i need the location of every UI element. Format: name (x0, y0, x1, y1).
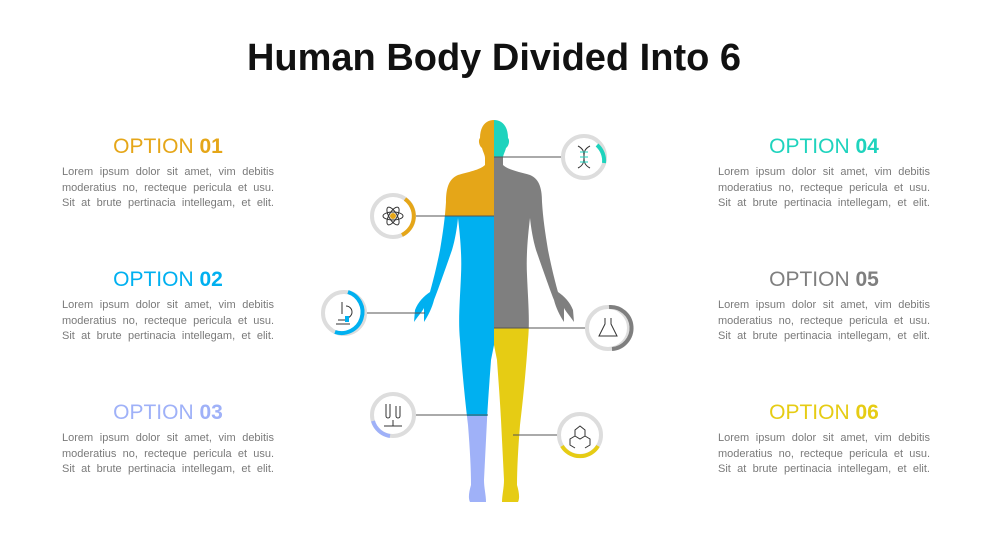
icon: flask (587, 307, 632, 349)
icon: microscope (323, 292, 365, 334)
option 01 (62, 135, 274, 209)
option 06: OPTION 06 (769, 401, 879, 424)
icon: molecule (559, 414, 601, 456)
option 02: Lorem ipsum dolor sit amet, vim debitis moderatius no, recteque pericula et usu. Sit at brute pertinacia intellegam, et elit. (62, 299, 274, 342)
option 06: Lorem ipsum dolor sit amet, vim debitis moderatius no, recteque pericula et usu. Sit at brute pertinacia intellegam, et elit. (718, 432, 930, 475)
option 05: Lorem ipsum dolor sit amet, vim debitis moderatius no, recteque pericula et usu. Sit at brute pertinacia intellegam, et elit. (718, 299, 930, 342)
option 04: Lorem ipsum dolor sit amet, vim debitis moderatius no, recteque pericula et usu. Sit at brute pertinacia intellegam, et elit. (718, 166, 930, 209)
option 02: OPTION 02 (113, 268, 223, 291)
option 04 (718, 135, 930, 209)
title: Human Body Divided Into 6 (247, 37, 741, 79)
right half body (494, 120, 574, 502)
option 03: Lorem ipsum dolor sit amet, vim debitis moderatius no, recteque pericula et usu. Sit at brute pertinacia intellegam, et elit. (62, 432, 274, 475)
option 04: OPTION 04 (769, 135, 879, 158)
option 05: OPTION 05 (769, 268, 879, 291)
icon: dna (563, 136, 605, 178)
connector lines (366, 157, 586, 435)
option 06 (718, 401, 930, 475)
option 01: OPTION 01 (113, 135, 223, 158)
icon: test tubes (372, 394, 414, 436)
option 05 (718, 268, 930, 342)
left half body (414, 120, 494, 502)
body figure diagram (321, 120, 634, 502)
option 02 (62, 268, 274, 342)
option 01: Lorem ipsum dolor sit amet, vim debitis moderatius no, recteque pericula et usu. Sit at brute pertinacia intellegam, et elit. (62, 166, 274, 209)
option 03 (62, 401, 274, 475)
option 03: OPTION 03 (113, 401, 223, 424)
icon: atom (372, 195, 414, 237)
